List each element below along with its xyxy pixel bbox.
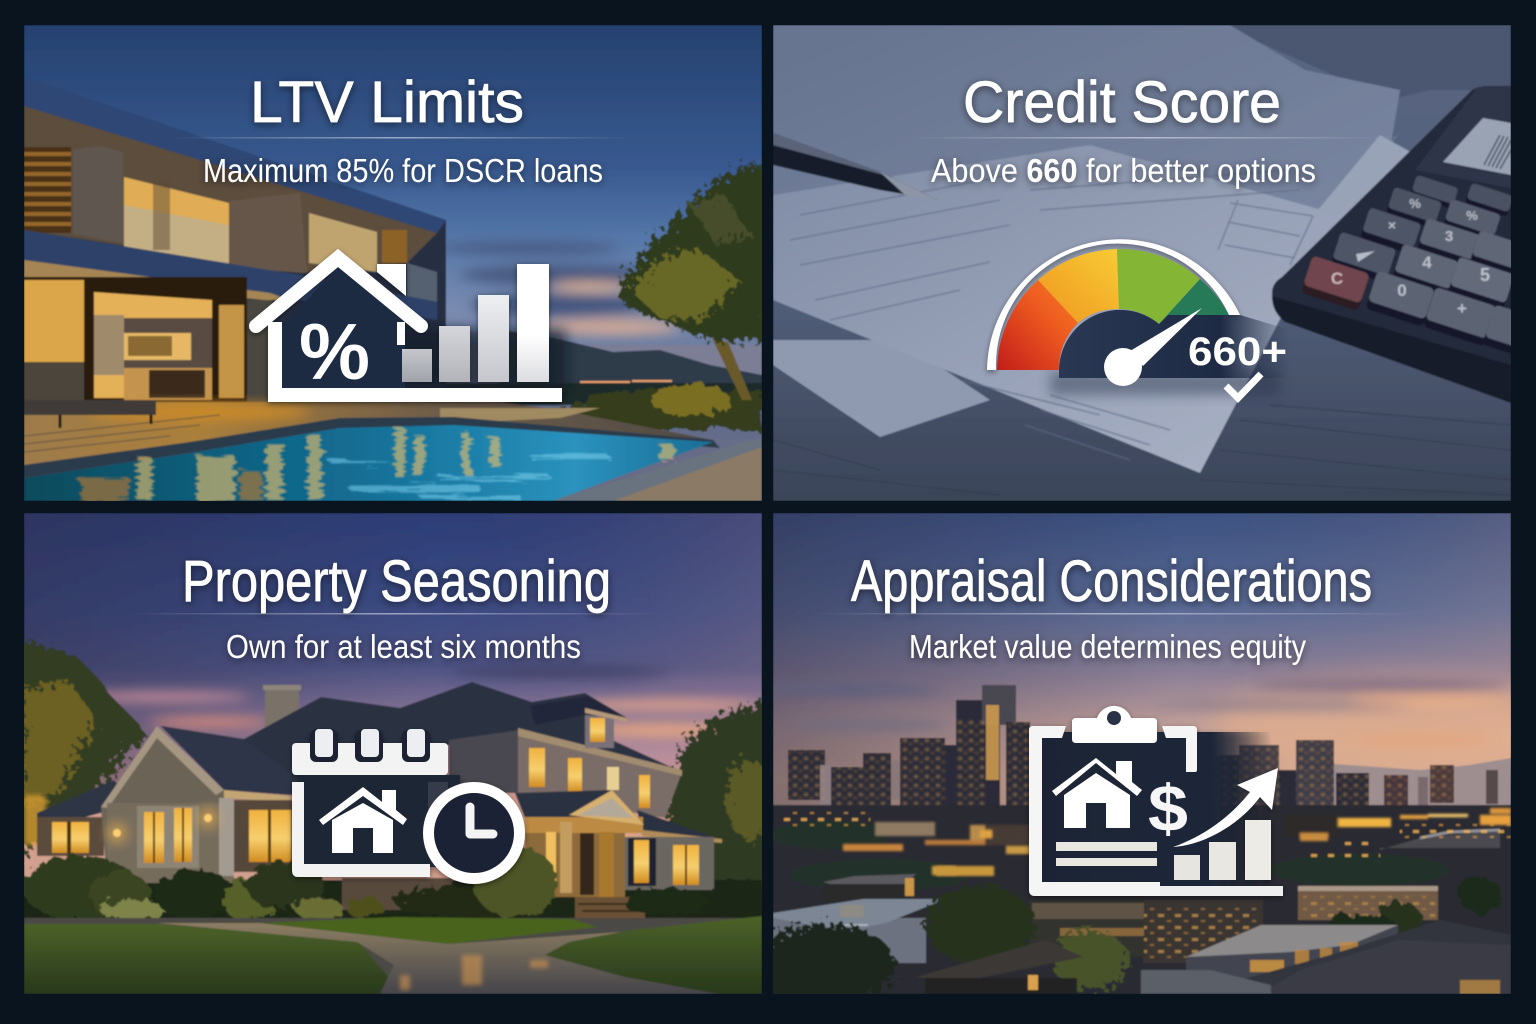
title: Credit Score: Credit Score <box>963 70 1281 135</box>
title: Appraisal Considerations: Appraisal Considerations <box>851 549 1372 614</box>
calculator <box>1272 86 1536 403</box>
photo: paperwork and calculator on desk <box>773 25 1536 501</box>
percent sign: % <box>299 307 370 396</box>
icon: house with percent and bar chart <box>256 258 565 396</box>
needle <box>1130 308 1202 366</box>
house <box>319 787 407 853</box>
calculator: % <box>1466 208 1478 223</box>
label 660+: 660+ <box>1188 330 1287 374</box>
panel: Credit Score <box>773 25 1536 501</box>
panel: LTV Limits <box>24 25 770 501</box>
calculator: × <box>1388 217 1396 233</box>
panel: Appraisal Considerations <box>755 513 1536 1007</box>
calculator: 3 <box>1445 228 1453 245</box>
growth bars and arrow <box>1160 768 1283 896</box>
title: Property Seasoning: Property Seasoning <box>182 549 611 614</box>
title: LTV Limits: LTV Limits <box>250 70 524 135</box>
calculator: 0 <box>1397 281 1407 300</box>
icon: credit score gauge <box>987 239 1290 398</box>
subtitle: Own for at least six months: Own for at least six months <box>226 628 581 665</box>
subtitle: Above 660 for better options: Above 660 for better options <box>931 152 1316 189</box>
photo: city skyline at dusk <box>755 513 1536 1007</box>
calculator: + <box>1457 299 1467 318</box>
bars <box>402 264 549 382</box>
photo: suburban house at sunset <box>16 513 775 994</box>
calculator: % <box>1409 196 1421 211</box>
icon: calendar with house and clock <box>292 729 520 878</box>
calculator: 4 <box>1422 253 1432 272</box>
clock <box>428 788 520 878</box>
check mark <box>1226 374 1261 398</box>
calculator: C <box>1331 269 1343 288</box>
subtitle: Maximum 85% for DSCR loans: Maximum 85% for DSCR loans <box>203 152 603 189</box>
calculator: 5 <box>1480 265 1490 285</box>
icon: clipboard with house, dollar and growth chart: $ <box>1148 771 1188 845</box>
photo: modern house with pool at dusk <box>24 25 770 501</box>
panel: Property Seasoning <box>16 513 775 994</box>
subtitle: Market value determines equity: Market value determines equity <box>909 628 1306 665</box>
icon: clipboard with house, dollar and growth chart <box>1029 706 1283 896</box>
